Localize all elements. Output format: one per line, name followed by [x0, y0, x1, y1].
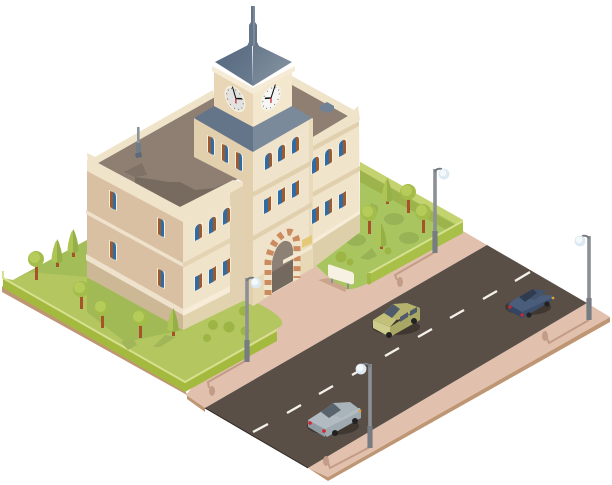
- right lawn trees: [361, 178, 431, 249]
- lamp shadows: [208, 252, 589, 468]
- olive car: [372, 303, 420, 338]
- clock tower: [212, 66, 295, 127]
- roof vent: [320, 102, 334, 113]
- left lawn bushes: [203, 306, 250, 342]
- shadows on the lawn: [346, 203, 419, 260]
- main roof: [98, 97, 260, 207]
- street lamp 2: [432, 169, 449, 253]
- silver car: [307, 402, 361, 437]
- clock right: [261, 80, 281, 116]
- arched entrance: [264, 232, 312, 298]
- street lamp 1: [244, 278, 261, 362]
- left lawn: [2, 240, 282, 395]
- pavilion roof: [194, 106, 312, 152]
- clock left: [225, 81, 245, 117]
- front right facade, west section: [183, 196, 245, 330]
- central pavilion: [194, 118, 360, 306]
- blue car: [505, 289, 554, 318]
- right lawn: [313, 162, 463, 289]
- tower cornice: [212, 66, 295, 94]
- right lawn bushes: [336, 248, 392, 266]
- sign board: [318, 264, 354, 292]
- roof antenna: [135, 127, 142, 158]
- far sidewalk: [308, 303, 610, 481]
- left lawn trees: [28, 229, 178, 338]
- lane markings: [253, 272, 530, 432]
- tower roof and spire: [215, 6, 292, 86]
- left wall: [86, 165, 183, 330]
- windows: [109, 135, 347, 292]
- street lamp 4: [575, 236, 592, 320]
- parapets: [87, 76, 360, 222]
- building: [86, 6, 360, 330]
- plaza and near sidewalk: [186, 231, 487, 412]
- street lamp 3: [356, 364, 373, 448]
- road: [205, 245, 587, 468]
- pavilion side pier: [230, 186, 243, 305]
- right rear roof: [292, 83, 348, 137]
